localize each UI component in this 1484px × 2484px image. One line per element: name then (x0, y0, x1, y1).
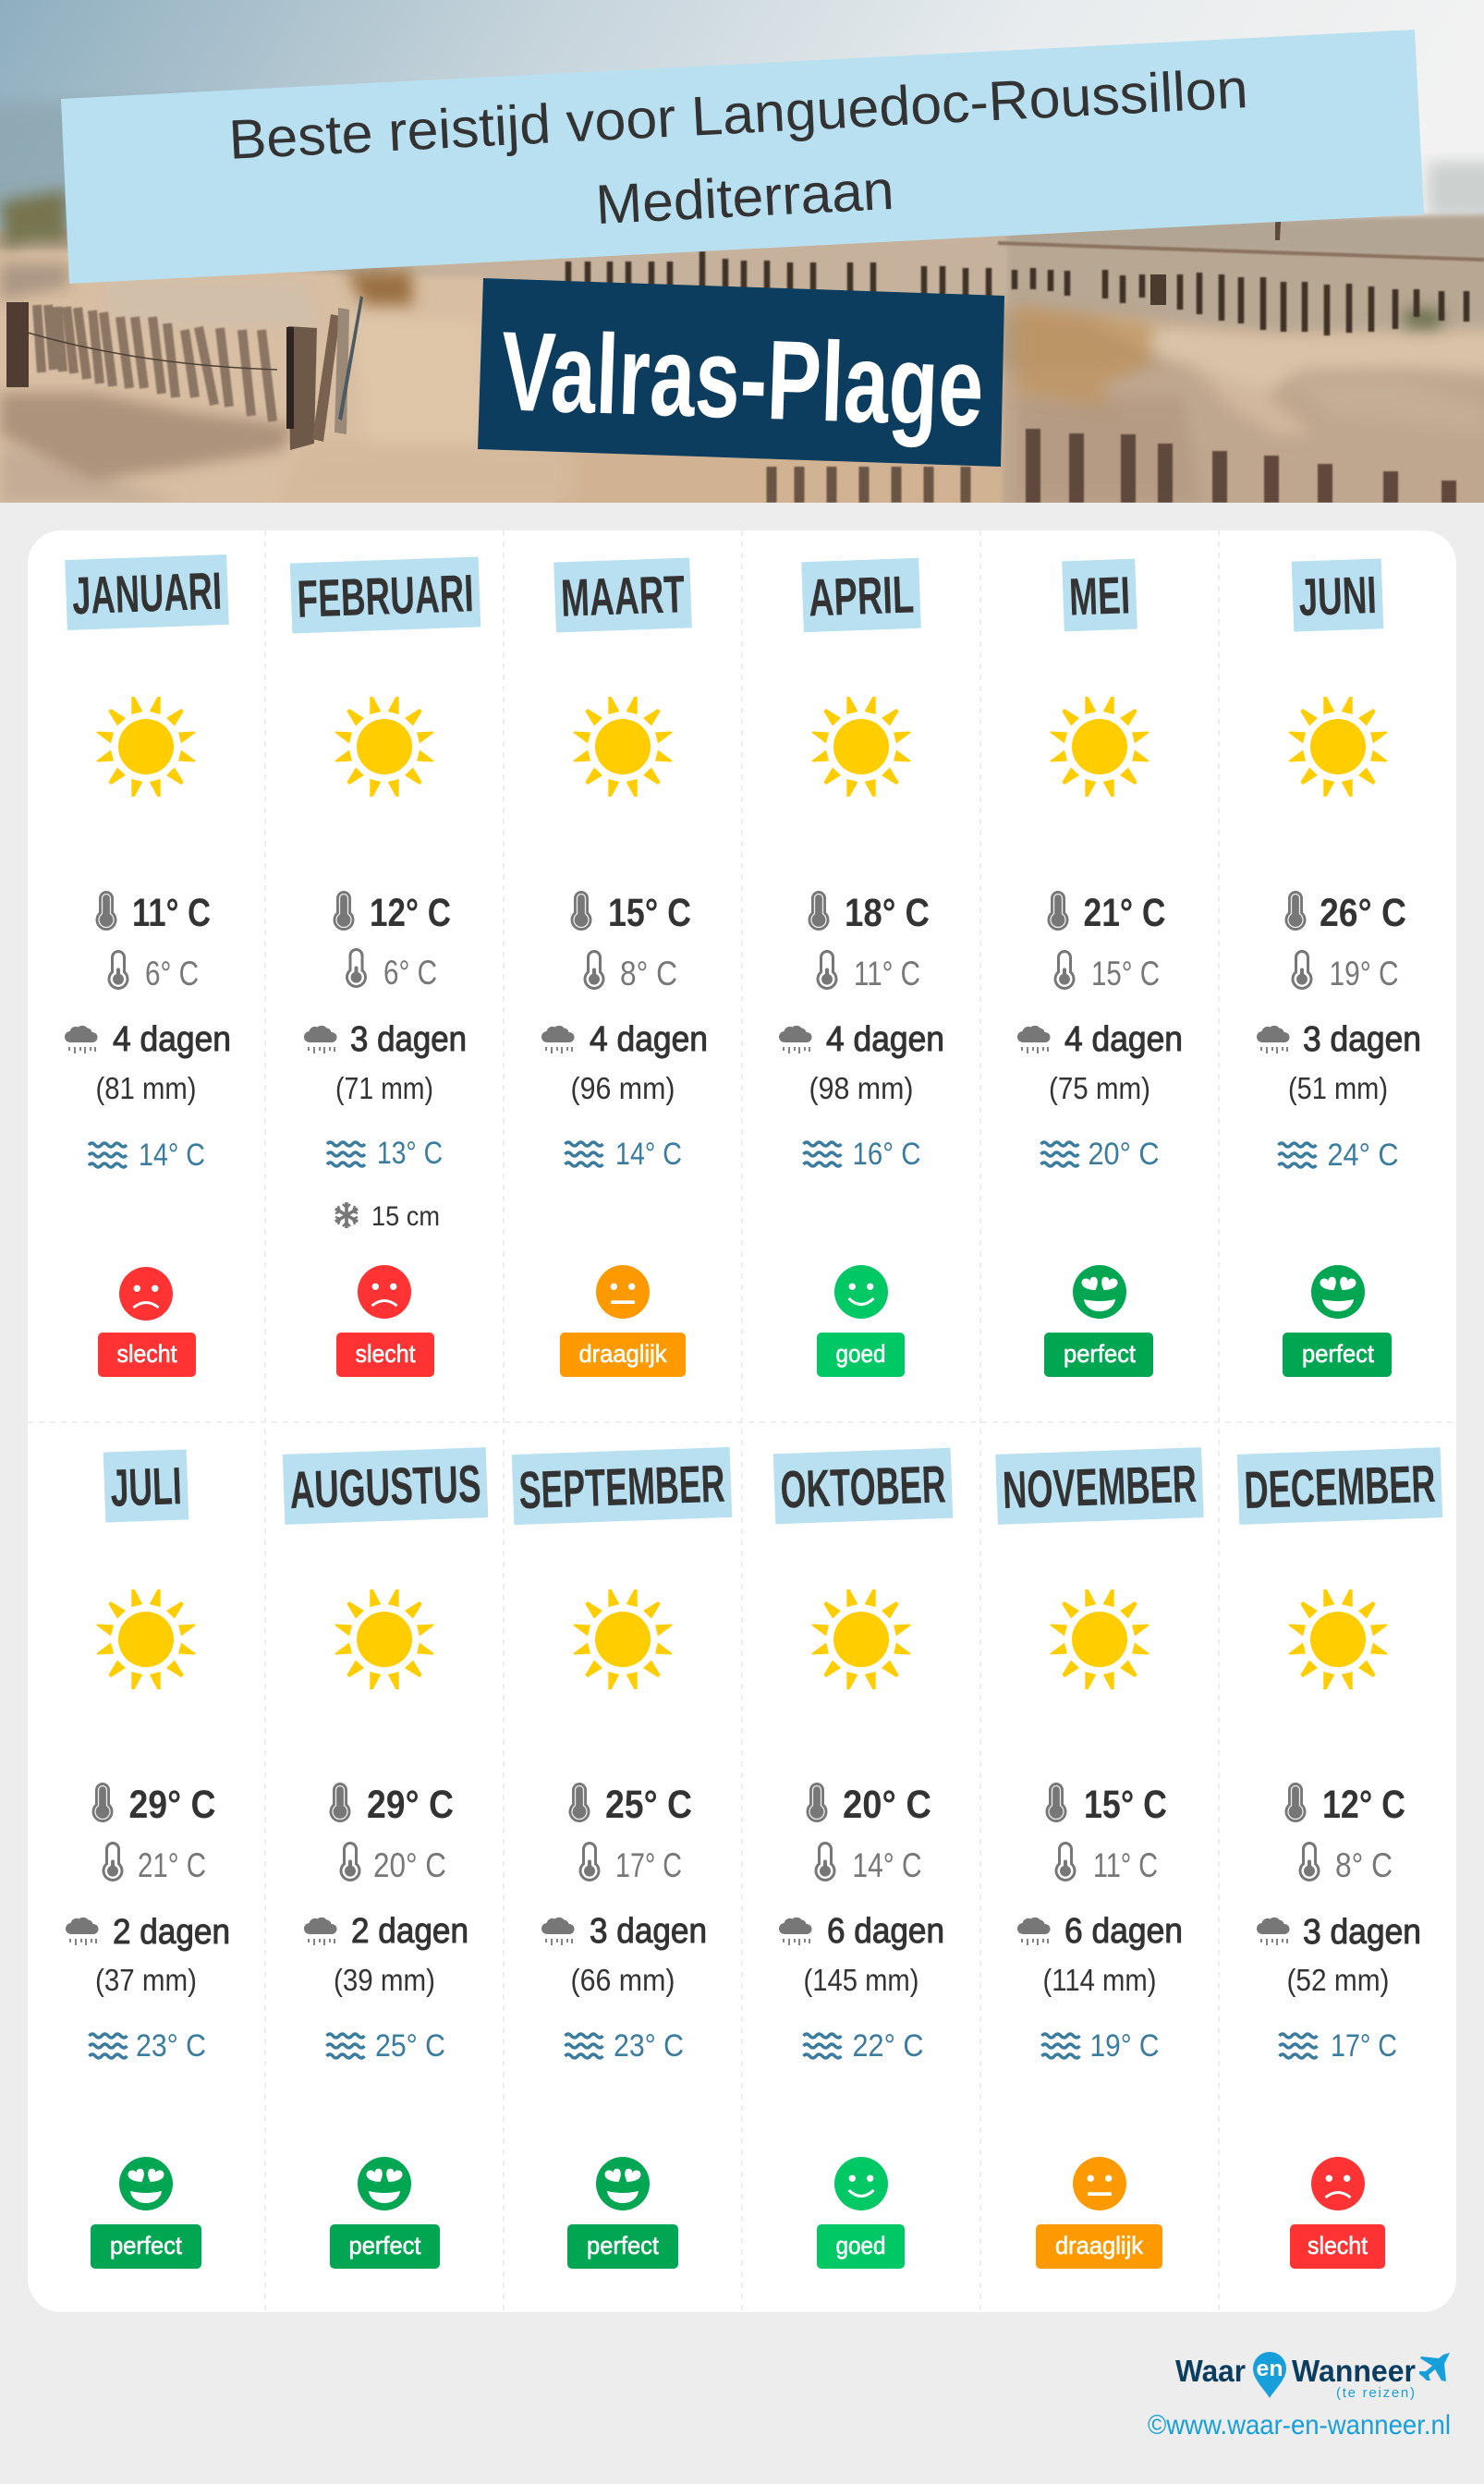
icon: thermometer high (329, 1783, 351, 1822)
sea temperature: 24° C (1327, 1138, 1399, 1173)
foreground fence (1033, 429, 1449, 503)
sea temperature: 13° C (377, 1136, 443, 1171)
rating badge: perfect (587, 2232, 659, 2259)
icon: thermometer low (584, 950, 604, 990)
icon: sun (1288, 1589, 1388, 1689)
precipitation: (52 mm) (1286, 1963, 1390, 1997)
max temperature: 21° C (1083, 891, 1166, 935)
panel: mei (1017, 559, 1183, 1377)
icon: waves (1279, 2034, 1317, 2058)
month label (283, 1447, 488, 1525)
icon: sad smiley (1311, 2157, 1365, 2210)
rating badge: perfect (1064, 1340, 1136, 1368)
icon: waves (804, 1142, 841, 1166)
back fence (568, 251, 1466, 335)
rain days: 3 dagen (1303, 1020, 1421, 1059)
icon: thermometer high (571, 891, 591, 931)
rain days: 6 dagen (1064, 1912, 1183, 1951)
month label (995, 1447, 1204, 1525)
icon: thermometer low (1053, 950, 1076, 990)
icon: waves (804, 2034, 841, 2058)
icon: waves (89, 2034, 127, 2058)
rating badge (1290, 2224, 1385, 2269)
panel: januari (65, 554, 231, 1377)
month label (773, 1448, 953, 1524)
icon: love smiley (1073, 1265, 1126, 1319)
icon: thermometer high (1048, 891, 1068, 931)
icon: snowflake (335, 1202, 358, 1228)
max temperature: 12° C (370, 891, 451, 935)
panel: december (1237, 1447, 1442, 2269)
icon: happy smiley (834, 2157, 888, 2210)
logo word: Wanneer: Wanneer (1292, 2354, 1416, 2388)
max temperature: 25° C (605, 1783, 692, 1827)
min temperature: 6° C (383, 954, 437, 992)
icon: rain cloud (65, 1026, 98, 1053)
rating badge (567, 2224, 678, 2269)
vegetation patches (0, 189, 1441, 407)
panel: april (779, 558, 944, 1377)
rain days: 2 dagen (351, 1912, 468, 1951)
rating badge: slecht (355, 1340, 416, 1368)
min temperature: 8° C (620, 955, 677, 992)
icon: rain cloud (66, 1918, 99, 1945)
rating badge: goed (835, 2232, 885, 2259)
icon: thermometer low (1292, 950, 1312, 990)
icon: waves (566, 1142, 602, 1166)
month label: JANUARI (71, 562, 223, 626)
month label: MAART (560, 565, 686, 628)
month label: NOVEMBER (1002, 1455, 1198, 1520)
precipitation: (81 mm) (96, 1071, 196, 1105)
min temperature: 15° C (1091, 955, 1160, 992)
month label: SEPTEMBER (518, 1455, 726, 1520)
precipitation: (66 mm) (571, 1963, 675, 1997)
icon: sun (1050, 697, 1149, 797)
icon: neutral smiley (596, 1265, 650, 1319)
icon: thermometer high (92, 1783, 113, 1822)
icon: waves (89, 1143, 127, 1167)
panel: juni (1257, 558, 1421, 1377)
sea temperature: 23° C (614, 2028, 684, 2064)
icon: thermometer low (578, 1842, 601, 1881)
month label: OKTOBER (779, 1455, 947, 1520)
sea temperature: 19° C (1090, 2028, 1159, 2064)
rain days: 3 dagen (590, 1912, 707, 1951)
min temperature: 11° C (854, 955, 920, 992)
month label: FEBRUARI (296, 564, 475, 629)
rating badge (330, 2224, 440, 2269)
precipitation: (39 mm) (334, 1963, 435, 1997)
precipitation: (75 mm) (1049, 1071, 1150, 1105)
sea temperature: 22° C (852, 2028, 924, 2064)
rain days: 2 dagen (113, 1913, 230, 1952)
precipitation: (37 mm) (95, 1963, 197, 1997)
icon: thermometer low (1055, 1842, 1076, 1881)
rating badge (1283, 1333, 1392, 1377)
month label (103, 1449, 189, 1523)
icon: waves (327, 1142, 365, 1166)
rain days: 4 dagen (590, 1020, 708, 1059)
panel: september (512, 1447, 732, 2269)
icon: waves (1042, 2034, 1079, 2058)
icon: thermometer high (569, 1783, 590, 1822)
icon: waves (327, 2034, 364, 2058)
max temperature: 29° C (129, 1783, 216, 1827)
place name banner (478, 278, 1004, 467)
place name: Valras-Plage (499, 308, 986, 450)
icon: thermometer high (808, 891, 830, 931)
icon: sun (96, 697, 196, 797)
icon: thermometer high (1284, 891, 1307, 931)
icon: sad smiley (119, 1267, 173, 1321)
icon: waves (566, 2034, 602, 2058)
max temperature: 20° C (843, 1783, 931, 1827)
rating badge: goed (835, 1340, 885, 1368)
max temperature: 29° C (367, 1783, 454, 1827)
icon: sun (1050, 1589, 1149, 1689)
max temperature: 18° C (845, 891, 930, 935)
min temperature: 6° C (145, 955, 199, 992)
icon: waves (1279, 1143, 1316, 1167)
icon: thermometer high (806, 1783, 828, 1822)
month label: MEI (1068, 566, 1131, 627)
icon: sun (335, 697, 434, 797)
title line 1: Beste reistijd voor Languedoc-Roussillon (227, 57, 1249, 171)
sea temperature: 25° C (375, 2028, 445, 2064)
icon: rain cloud (541, 1918, 575, 1945)
icon: happy smiley (834, 1265, 888, 1319)
icon: sad smiley (358, 1265, 411, 1319)
snow depth: 15 cm (371, 1201, 440, 1232)
rain days: 4 dagen (826, 1020, 944, 1059)
precipitation: (96 mm) (571, 1071, 675, 1105)
icon: love smiley (119, 2157, 173, 2210)
icon: map pin with en: en (1257, 2356, 1283, 2381)
header photo: beach dunes with wooden fences (0, 0, 1484, 518)
icon: rain cloud (541, 1026, 575, 1053)
month label (65, 554, 229, 630)
icon: sun (811, 697, 911, 797)
rating badge: perfect (1302, 1340, 1374, 1368)
rain days: 3 dagen (1303, 1913, 1421, 1952)
precipitation: (145 mm) (804, 1963, 918, 1997)
precipitation: (71 mm) (335, 1071, 433, 1105)
logo word: Waar: Waar (1175, 2354, 1246, 2388)
precipitation: (51 mm) (1288, 1071, 1388, 1105)
icon: sun (573, 1589, 673, 1689)
icon: sun (1288, 697, 1388, 797)
sea temperature: 14° C (615, 1137, 682, 1172)
rating badge: perfect (110, 2232, 182, 2259)
min temperature: 21° C (138, 1846, 206, 1884)
icon: thermometer low (1299, 1842, 1320, 1881)
icon: rain cloud (304, 1026, 337, 1053)
panel: months card (28, 530, 1456, 2312)
panel: november (995, 1447, 1204, 2269)
rating badge (817, 2224, 905, 2269)
panel: maart (541, 557, 708, 1377)
icon: airplane (1419, 2353, 1450, 2381)
sea temperature: 17° C (1331, 2028, 1397, 2064)
precipitation: (114 mm) (1042, 1963, 1157, 1997)
logo tagline: (te reizen) (1336, 2385, 1415, 2401)
month label: APRIL (808, 566, 915, 627)
rating badge (1036, 2224, 1162, 2269)
rating badge: perfect (349, 2232, 421, 2259)
left fence (37, 305, 273, 421)
rating badge: draaglijk (578, 1340, 667, 1368)
title banner (61, 30, 1424, 284)
min temperature: 11° C (1093, 1846, 1158, 1884)
month label: AUGUSTUS (288, 1455, 482, 1520)
month label (553, 557, 692, 633)
rating badge (1044, 1333, 1153, 1377)
rating badge: draaglijk (1055, 2232, 1143, 2259)
icon: thermometer high (333, 891, 355, 931)
rating badge (98, 1333, 196, 1377)
month label (801, 558, 921, 632)
icon: rain cloud (304, 1918, 337, 1945)
rain days: 4 dagen (1064, 1020, 1183, 1059)
icon: thermometer low (102, 1842, 124, 1881)
panel: augustus (283, 1447, 488, 2269)
panel: juli (66, 1449, 230, 2269)
max temperature: 12° C (1322, 1783, 1405, 1827)
icon: thermometer high (96, 891, 116, 931)
icon: love smiley (596, 2157, 650, 2210)
rating badge (817, 1333, 905, 1377)
icon: thermometer low (107, 950, 129, 990)
rain days: 3 dagen (350, 1020, 467, 1059)
icon: sun (96, 1589, 196, 1689)
max temperature: 26° C (1320, 891, 1406, 935)
month label (1292, 558, 1383, 632)
icon: thermometer low (815, 1842, 835, 1881)
icon: rain cloud (1017, 1026, 1051, 1053)
icon: sun (573, 697, 673, 797)
rain days: 4 dagen (113, 1020, 231, 1059)
rain days: 6 dagen (827, 1912, 944, 1951)
icon: sun (335, 1589, 434, 1689)
max temperature: 11° C (132, 891, 211, 935)
max temperature: 15° C (1084, 1783, 1167, 1827)
min temperature: 8° C (1335, 1846, 1393, 1884)
precipitation: (98 mm) (809, 1071, 913, 1105)
panel: februari (290, 556, 480, 1377)
icon: thermometer high (1284, 1783, 1307, 1822)
min temperature: 17° C (615, 1846, 682, 1884)
icon: rain cloud (1257, 1026, 1290, 1053)
min temperature: 19° C (1329, 955, 1399, 992)
min temperature: 20° C (373, 1846, 446, 1884)
logo: Waar en Wanneer (1175, 2352, 1450, 2401)
rating badge: slecht (116, 1340, 177, 1368)
month label (1062, 559, 1137, 631)
icon: rain cloud (779, 1918, 812, 1945)
icon: thermometer low (346, 948, 367, 988)
website copyright: ©www.waar-en-wanneer.nl (1148, 2410, 1451, 2441)
icon: thermometer low (340, 1842, 360, 1881)
month label: JUNI (1297, 566, 1378, 627)
month label (290, 556, 480, 634)
icon: rain cloud (779, 1026, 812, 1053)
sea temperature: 16° C (852, 1137, 920, 1172)
title line 2: Mediterraan (594, 159, 895, 236)
icon: love smiley (358, 2157, 411, 2210)
month label (512, 1447, 732, 1525)
icon: rain cloud (1257, 1918, 1290, 1945)
icon: thermometer low (817, 950, 837, 990)
sea temperature: 20° C (1089, 1137, 1159, 1172)
sea temperature: 14° C (139, 1138, 205, 1173)
icon: love smiley (1311, 1265, 1365, 1319)
max temperature: 15° C (608, 891, 691, 935)
icon: map pin with en (1253, 2352, 1286, 2398)
icon: sun (811, 1589, 911, 1689)
rating badge (91, 2224, 201, 2269)
icon: neutral smiley (1073, 2157, 1126, 2210)
rating badge: slecht (1308, 2232, 1368, 2259)
panel: oktober (773, 1448, 953, 2269)
icon: thermometer high (1046, 1783, 1066, 1822)
rating badge (560, 1333, 686, 1377)
sea temperature: 23° C (136, 2028, 206, 2064)
rating badge (336, 1333, 434, 1377)
month label: JULI (109, 1456, 183, 1518)
min temperature: 14° C (852, 1846, 922, 1884)
icon: rain cloud (1017, 1918, 1051, 1945)
icon: waves (1040, 1142, 1078, 1166)
